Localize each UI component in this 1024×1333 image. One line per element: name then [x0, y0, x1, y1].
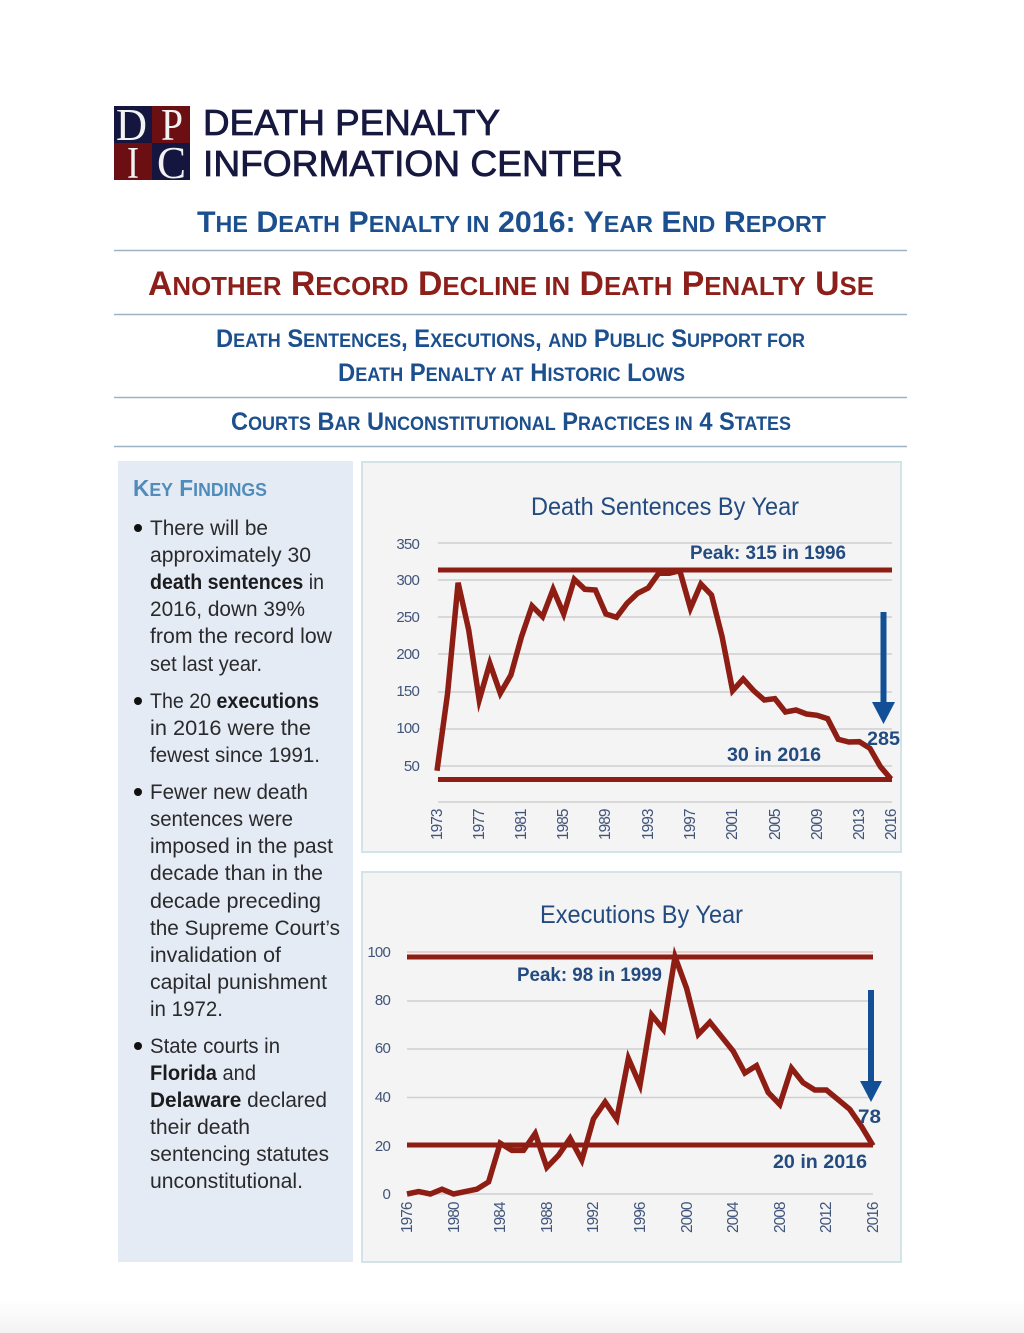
x axis years: 2013: [851, 809, 868, 840]
logo: DPIC: D: [116, 100, 147, 150]
bullet: state courts: State courts in: [150, 1035, 280, 1058]
x axis years: 1980: [446, 1201, 463, 1233]
bullet: fewer new sentences: imposed in the past: [150, 835, 333, 858]
chart title: executions: Executions By Year: [540, 901, 743, 929]
bullet: death sentences: There will be: [150, 517, 268, 540]
gridlines and y axis: [367, 944, 873, 1203]
x axis years: 1988: [539, 1202, 556, 1233]
gridlines and y axis: 80: [375, 992, 390, 1009]
subheading: historic lows: DEATH SENTENCES, EXECUTIONS, AND PUBLIC SUPPORT FOR: [216, 325, 805, 353]
gridlines and y axis: 250: [396, 609, 419, 626]
x axis years: 2000: [679, 1201, 696, 1233]
gridlines and y axis: 300: [396, 572, 419, 589]
x axis years: 1977: [471, 809, 488, 840]
gridlines and y axis: 200: [396, 646, 419, 663]
bullet: state courts: sentencing statutes: [150, 1143, 329, 1166]
bullet: death sentences: set last year.: [150, 653, 262, 676]
bullet: death sentences: [134, 517, 333, 676]
label: 285: 285: [867, 729, 900, 750]
label: peak 98: Peak: 98 in 1999: [517, 965, 662, 986]
x axis years: 1997: [682, 809, 699, 840]
label: 30 in 2016: 30 in 2016: [727, 745, 821, 766]
bullet: fewer new sentences: invalidation of: [150, 944, 281, 967]
x axis years: 1981: [513, 809, 530, 840]
bullet: state courts: Delaware declared: [150, 1089, 327, 1112]
organization name: DEATH PENALTY: [203, 102, 500, 143]
panel: executions chart: [362, 872, 901, 1262]
x axis years: 1973: [429, 809, 446, 840]
logo: DPIC: [114, 100, 190, 188]
arrow: decline: [872, 612, 895, 724]
gridlines and y axis: 20: [375, 1138, 390, 1155]
reference lines: peak and 2016: [407, 957, 873, 1145]
x axis years: 2012: [818, 1202, 835, 1233]
label: 78: 78: [858, 1107, 881, 1128]
logo: DPIC: P: [161, 100, 183, 150]
line series: executions: [407, 957, 873, 1194]
heading: record decline: ANOTHER RECORD DECLINE IN DEATH PENALTY USE: [148, 265, 874, 303]
x axis years: 1993: [640, 809, 657, 840]
bullet: executions: in 2016 were the: [150, 717, 311, 740]
bullet: state courts: [134, 1035, 329, 1193]
bullet: death sentences: 2016, down 39%: [150, 598, 305, 621]
gridlines and y axis: [396, 536, 892, 802]
logo: DPIC: C: [157, 138, 186, 188]
gridlines and y axis: 0: [382, 1186, 390, 1203]
x axis years: 2004: [725, 1201, 742, 1233]
bullet: fewer new sentences: the Supreme Court’s: [150, 917, 340, 940]
x axis years: 1985: [555, 809, 572, 840]
bullet: fewer new sentences: decade than in the: [150, 862, 323, 885]
x axis years: [429, 809, 900, 840]
gridlines and y axis: 150: [396, 683, 419, 700]
bullet: death sentences: approximately 30: [150, 544, 311, 567]
x axis years: 2008: [772, 1202, 789, 1233]
bullet: state courts: unconstitutional.: [150, 1170, 303, 1193]
x axis years: 1989: [597, 809, 614, 840]
bullet: death sentences: death sentences in: [150, 571, 324, 594]
bullet: executions: fewest since 1991.: [150, 744, 320, 767]
panel: key findings: [118, 461, 353, 1262]
bullet: fewer new sentences: in 1972.: [150, 998, 223, 1021]
bullet: fewer new sentences: capital punishment: [150, 971, 327, 994]
heading: report title: THE DEATH PENALTY IN 2016: YEAR END REPORT: [197, 206, 826, 239]
x axis years: [399, 1201, 882, 1233]
bullet: executions: [134, 690, 320, 767]
x axis years: 2001: [724, 809, 741, 840]
bullet: fewer new sentences: Fewer new death: [150, 781, 308, 804]
x axis years: 1996: [632, 1202, 649, 1233]
gridlines and y axis: 100: [396, 720, 419, 737]
x axis years: 2005: [767, 809, 784, 840]
x axis years: 1992: [585, 1202, 602, 1233]
organization name: INFORMATION CENTER: [203, 143, 623, 184]
bullet: state courts: their death: [150, 1116, 250, 1139]
bullet: fewer new sentences: sentences were: [150, 808, 293, 831]
bullet: death sentences: from the record low: [150, 625, 333, 648]
x axis years: 1976: [399, 1202, 416, 1233]
x axis years: 2009: [809, 809, 826, 840]
chart title: death sentences: Death Sentences By Year: [531, 493, 799, 521]
subheading: courts: COURTS BAR UNCONSTITUTIONAL PRACTICES IN 4 STATES: [231, 408, 791, 436]
label: 20 in 2016: 20 in 2016: [773, 1152, 867, 1173]
bullet: executions: The 20 executions: [150, 690, 319, 713]
gridlines and y axis: 60: [375, 1040, 390, 1057]
gridlines and y axis: 50: [404, 758, 419, 775]
gridlines and y axis: 350: [396, 536, 419, 553]
bullet: fewer new sentences: decade preceding: [150, 890, 321, 913]
label: peak 315: Peak: 315 in 1996: [690, 543, 846, 564]
x axis years: 2016: [883, 809, 900, 840]
x axis years: 2016: [865, 1202, 882, 1233]
gridlines and y axis: 40: [375, 1089, 390, 1106]
panel: death sentences chart: [362, 462, 901, 852]
reference lines: peak and 2016: [438, 570, 892, 780]
key findings heading: KEY FINDINGS: [133, 475, 267, 501]
subheading: historic lows: DEATH PENALTY AT HISTORIC LOWS: [338, 359, 685, 387]
gridlines and y axis: 100: [367, 944, 390, 961]
bullet: fewer new sentences: [134, 781, 340, 1021]
x axis years: 1984: [492, 1201, 509, 1233]
subheading: historic lows: [216, 325, 805, 387]
arrow: decline: [860, 990, 882, 1102]
bullet: state courts: Florida and: [150, 1062, 256, 1085]
organization name: [203, 102, 623, 184]
logo: DPIC: I: [127, 138, 139, 188]
line series: death sentences: [437, 571, 891, 779]
